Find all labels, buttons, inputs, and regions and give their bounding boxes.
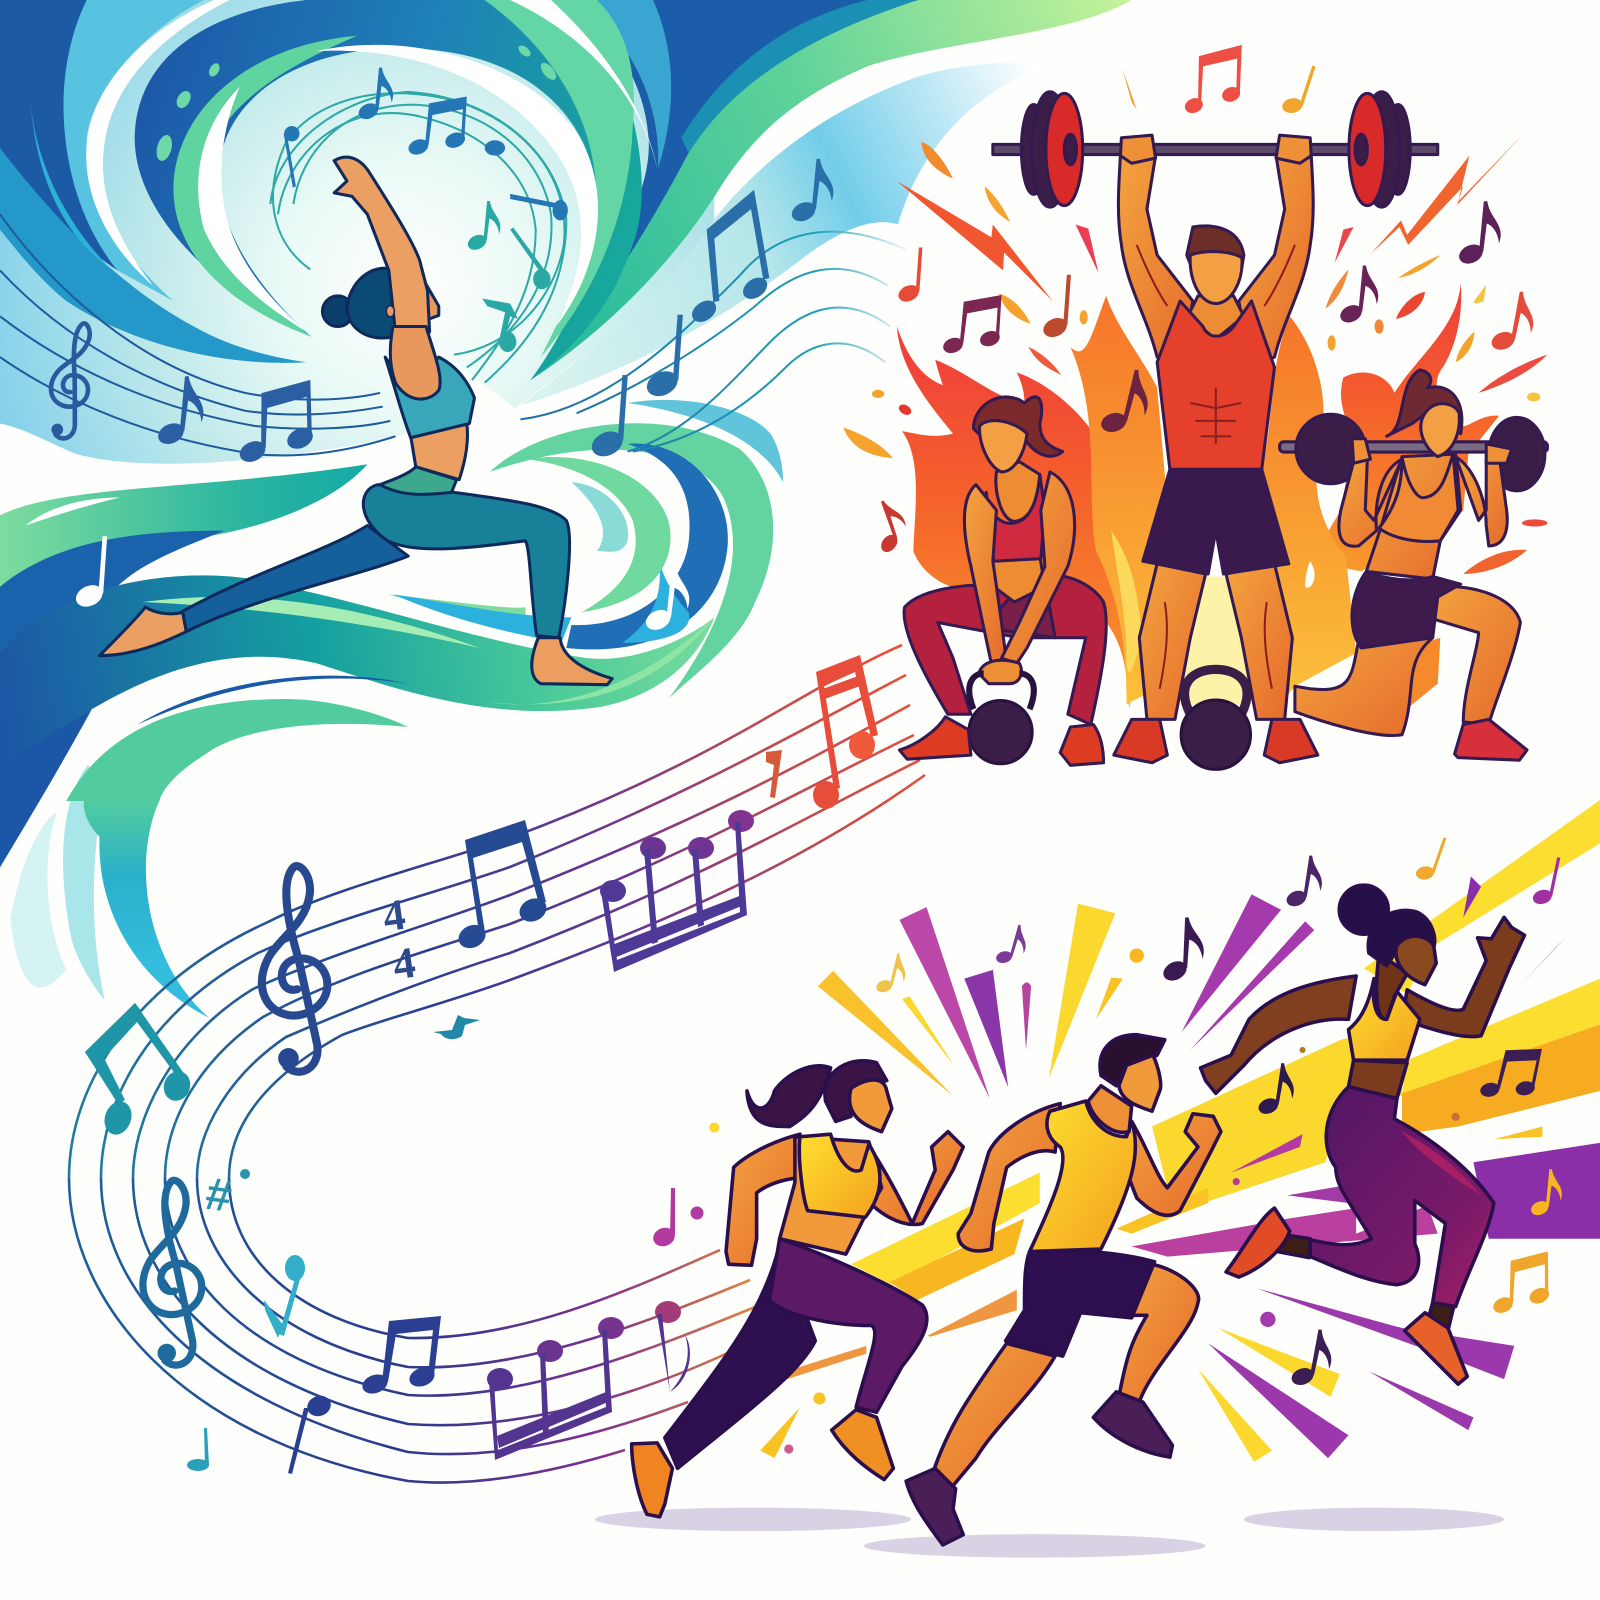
shoes left woman (899, 717, 1104, 765)
torso (780, 1137, 882, 1254)
face (1421, 404, 1459, 457)
legs (904, 575, 1106, 724)
left red flame (897, 327, 1152, 709)
small teal note bottom (187, 1428, 209, 1471)
waist (1348, 1060, 1407, 1098)
torso (991, 556, 1045, 602)
panel: running group (595, 800, 1600, 1558)
red beamed note (813, 655, 878, 809)
ground wave highlights (138, 594, 714, 724)
top right light bands (520, 0, 1132, 406)
face (1119, 1055, 1161, 1111)
left plates (1021, 92, 1083, 207)
front ankle (1427, 1303, 1454, 1331)
time signature: 4 (380, 890, 408, 941)
white accent (26, 497, 120, 526)
figure: yoga woman (99, 157, 612, 685)
barbell bar (993, 144, 1438, 155)
hair (347, 268, 408, 338)
neck (1377, 953, 1407, 1019)
neck (1088, 1086, 1132, 1132)
white swirl highlights (86, 0, 658, 332)
lower four joined notes (487, 1301, 690, 1460)
dark blue left wave (0, 531, 224, 714)
face (1190, 252, 1242, 304)
figure: central lifter (993, 92, 1438, 763)
small teal fish note (433, 1015, 480, 1039)
shorts (1352, 571, 1461, 648)
hair bun (1339, 885, 1388, 934)
green inner ring (173, 36, 357, 337)
right blue notes (588, 159, 833, 461)
hair (1187, 226, 1244, 270)
centre teal notes (465, 201, 551, 352)
ear (386, 306, 394, 317)
crop top (385, 357, 474, 438)
front leg (363, 485, 569, 638)
kettlebell left (969, 673, 1034, 764)
ground wave (0, 575, 714, 781)
pants (1310, 1087, 1494, 1307)
left staff lines with notes (0, 214, 395, 455)
figure: rear runner woman (632, 1061, 963, 1517)
rear arm (958, 1104, 1060, 1251)
centre staff arcs (270, 92, 566, 383)
sharp sign: # (203, 1167, 235, 1222)
left arm (1339, 459, 1402, 546)
figure: left squat woman (904, 397, 1106, 724)
front arm (1119, 1114, 1221, 1215)
lower flame (1407, 638, 1440, 707)
front shin (532, 638, 612, 685)
cyan note on curve (264, 1255, 305, 1338)
back leg (183, 526, 408, 632)
magenta small note (651, 1188, 704, 1249)
pants highlight (1402, 1132, 1481, 1195)
right mini swirl (490, 400, 783, 699)
quarter note bottom (288, 1392, 334, 1474)
right red flame (1310, 283, 1499, 571)
neck (1188, 296, 1244, 339)
rear leg (933, 1343, 1055, 1489)
swirl droplets (154, 43, 559, 163)
outer ring (135, 0, 642, 380)
front shoe (832, 1410, 893, 1480)
hair bun (322, 296, 353, 327)
shorts (1143, 469, 1289, 574)
teal beamed note (85, 1003, 194, 1138)
centre notes (284, 68, 568, 220)
front plate (1489, 417, 1545, 491)
beamed note navy (455, 820, 550, 952)
lower left green wave (0, 464, 367, 617)
red small accent (766, 750, 782, 798)
midriff (411, 423, 468, 480)
arms (1118, 156, 1193, 367)
four joined notes (600, 810, 754, 972)
face (421, 276, 439, 332)
front shoe (1093, 1392, 1172, 1457)
lower left band (0, 148, 306, 363)
time signature: 4 (390, 938, 418, 989)
figure: right lunge woman (1280, 370, 1547, 760)
face (1396, 936, 1436, 985)
panel: staff ribbon (69, 645, 925, 1483)
tank (1030, 1101, 1135, 1252)
rear arm (726, 1134, 805, 1265)
lower beamed note navy (360, 1316, 441, 1397)
top (1379, 454, 1458, 541)
front arm (1402, 917, 1524, 1037)
kettlebell centre (1181, 669, 1251, 769)
arms (964, 485, 1007, 663)
staff lower lines (69, 1178, 760, 1483)
right staff lines (520, 232, 907, 452)
shorts (1006, 1251, 1155, 1356)
staff notes (85, 655, 878, 1474)
panel: flowing yoga swirl (0, 0, 1132, 1018)
cyan band (64, 0, 204, 301)
rear shoe (1226, 1208, 1290, 1277)
burst rays (760, 800, 1600, 1462)
dots (709, 948, 1460, 1454)
left notes (155, 376, 318, 466)
treble clef left (41, 319, 102, 442)
back leg (665, 1244, 815, 1468)
rear plate (1296, 414, 1365, 484)
sparks (843, 69, 1547, 574)
rear ankle (1277, 1234, 1310, 1258)
staff upper lines (69, 645, 925, 1178)
raised arm (334, 157, 430, 337)
hair (1100, 1035, 1165, 1086)
front arm (861, 1132, 963, 1224)
treble clef lower (143, 1180, 202, 1365)
hair tail (747, 1066, 831, 1127)
top (799, 1134, 880, 1217)
hair (973, 397, 1063, 456)
face (980, 421, 1027, 472)
hands (1352, 439, 1512, 463)
bottom swoosh (0, 699, 408, 1018)
back arm (1201, 976, 1356, 1093)
shoes (1114, 719, 1167, 763)
torso (1366, 454, 1461, 579)
waistband (380, 467, 457, 494)
right flame (1262, 316, 1356, 699)
treble clef upper (262, 866, 327, 1072)
right arm (1456, 457, 1507, 546)
barbell (1280, 442, 1547, 452)
hair (825, 1061, 887, 1121)
notes around runners (873, 832, 1562, 1391)
right plates (1349, 92, 1410, 207)
back leg (1295, 628, 1433, 735)
figure: leading jumper woman (1201, 885, 1524, 1384)
hair (1368, 910, 1435, 966)
hands (1120, 135, 1156, 163)
front leg (1428, 586, 1520, 724)
front shoe (1455, 719, 1527, 760)
hair (1387, 370, 1462, 436)
white note left (72, 536, 107, 611)
left dark corner (0, 0, 117, 270)
flames (897, 283, 1499, 709)
front leg (769, 1239, 927, 1412)
rear shoe (632, 1443, 672, 1517)
upper arm (390, 327, 440, 399)
figure: centre running man (906, 1035, 1221, 1545)
hands (979, 660, 1021, 684)
back foot (99, 607, 186, 656)
face (849, 1080, 892, 1132)
music notes around lifters (861, 45, 1536, 558)
crop top (1348, 979, 1420, 1060)
ground shadows (595, 1508, 1504, 1558)
time signature (380, 890, 418, 989)
staff dot (240, 1169, 250, 1179)
front leg (1119, 1264, 1199, 1402)
rear shoe (906, 1468, 963, 1545)
centre flame (1070, 296, 1172, 704)
tank top (1157, 301, 1274, 469)
muscle and abs detail (1137, 245, 1295, 689)
flame glow (1175, 577, 1262, 704)
front shoe (1405, 1313, 1467, 1384)
legs (1139, 564, 1206, 719)
panel: strength training group (843, 45, 1547, 769)
white note right (643, 565, 689, 634)
swirl base wash (0, 0, 714, 464)
